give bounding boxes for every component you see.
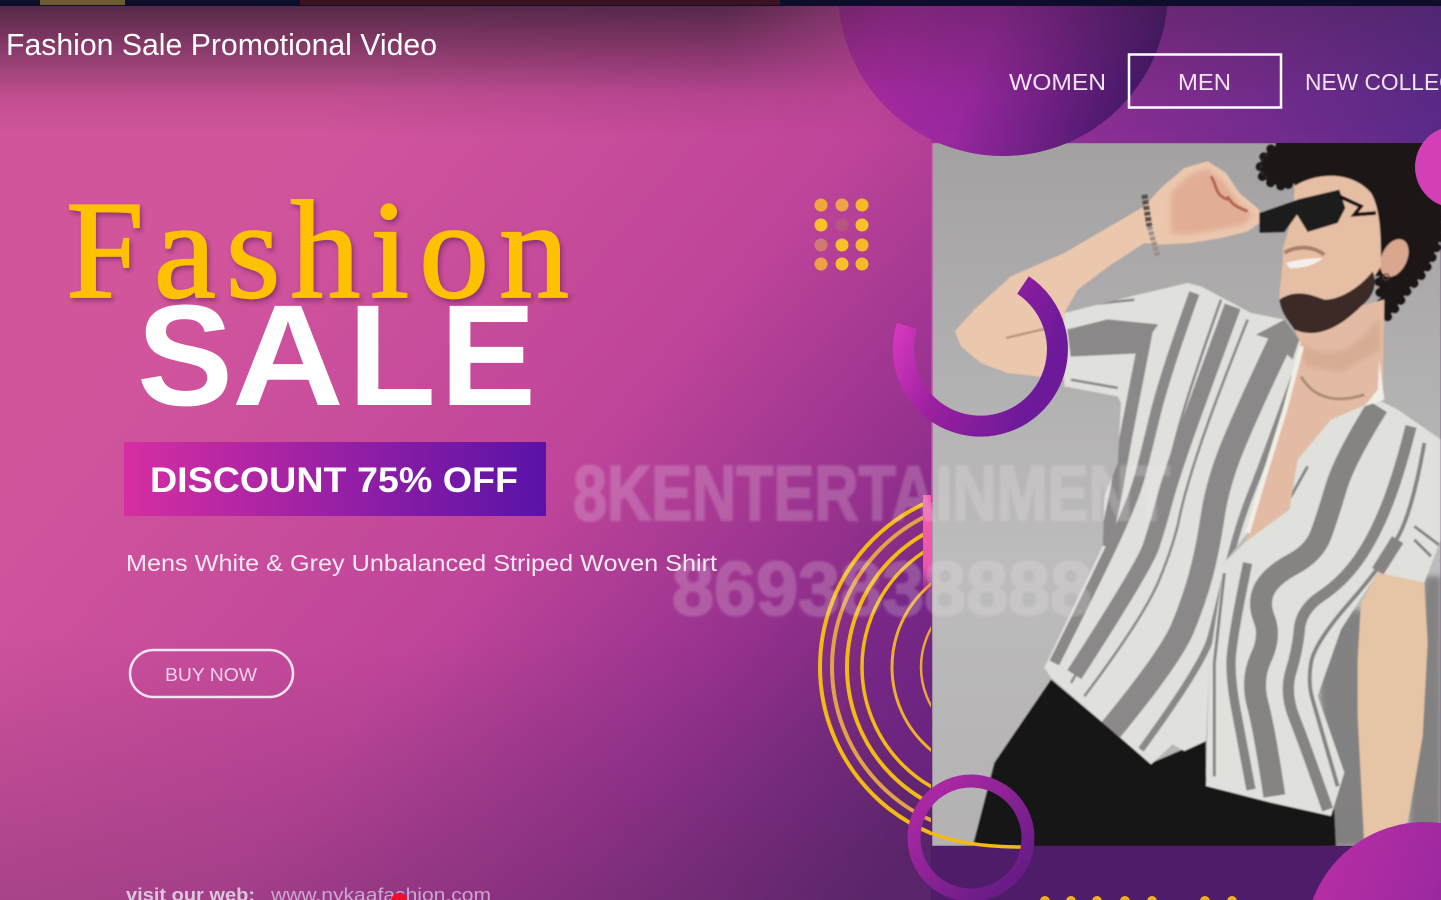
bottom yellow dots <box>1040 896 1237 900</box>
nav item men button <box>1129 54 1281 108</box>
top right pink circle <box>1415 126 1441 208</box>
navigation <box>1009 54 1441 108</box>
neck and chest <box>1246 300 1384 541</box>
top right purple band <box>931 0 1441 143</box>
heading: Fashion: Fashion <box>66 173 569 328</box>
discount banner <box>124 442 546 516</box>
website line <box>126 885 491 900</box>
finger shadows <box>1211 176 1248 211</box>
ear <box>1380 238 1410 278</box>
moustache shadow <box>1284 248 1324 255</box>
watermark <box>573 449 1170 632</box>
beard <box>1279 271 1375 333</box>
bottom right purple circle <box>1305 822 1441 900</box>
yellow ground arc <box>931 833 1022 847</box>
model photo <box>932 143 1441 846</box>
earring <box>1383 274 1389 280</box>
right collar <box>1364 360 1384 406</box>
bottom purple ring <box>914 781 1028 895</box>
top purple circle <box>838 0 1168 156</box>
hand shading <box>1171 168 1253 235</box>
shirt right panel <box>1206 400 1441 816</box>
photo backdrop <box>932 143 1441 846</box>
bottom purple band <box>931 846 1441 900</box>
buy now button <box>130 650 293 697</box>
face <box>1279 176 1381 316</box>
heading: SALE: S <box>137 275 233 436</box>
sunglasses <box>1259 190 1376 233</box>
heading: SALE: A <box>232 275 344 436</box>
photo left edge line <box>931 143 932 503</box>
wall shadow <box>1314 576 1441 846</box>
watermark: 8693838888 <box>672 547 1092 632</box>
nav item women: WOMEN <box>1009 69 1106 95</box>
necklace <box>1301 376 1364 399</box>
video title: Fashion Sale Promotional Video <box>6 27 437 62</box>
left collar <box>1256 320 1299 360</box>
heading: SALE: E <box>440 275 536 436</box>
trousers <box>973 679 1336 846</box>
neck shadow <box>1303 322 1380 372</box>
raised arm <box>955 161 1259 380</box>
elbow crease <box>1006 329 1044 338</box>
buy now button: BUY NOW <box>165 665 257 685</box>
collar and placket <box>1248 346 1302 533</box>
smile <box>1286 258 1323 268</box>
bracelet <box>1144 195 1158 256</box>
pink edge glow <box>923 495 932 595</box>
dot grid <box>814 198 868 270</box>
video progress dot <box>391 893 407 900</box>
watermark: 8KENTERTAINMENT <box>573 449 1170 537</box>
video player top strip <box>0 0 1441 6</box>
product description: Mens White & Grey Unbalanced Striped Woven Shirt <box>126 550 718 576</box>
heading: SALE: L <box>348 275 436 436</box>
hair <box>1260 143 1441 320</box>
stray curls <box>1261 153 1268 178</box>
heading: SALE <box>137 275 536 436</box>
shirt left panel <box>1044 283 1302 764</box>
nav item men button: MEN <box>1178 69 1231 95</box>
right arm <box>1358 573 1428 846</box>
top shade over frame <box>0 6 1441 118</box>
concentric yellow circles <box>818 502 931 836</box>
purple open ring <box>903 285 1057 426</box>
discount banner: DISCOUNT 75% OFF <box>150 461 518 500</box>
